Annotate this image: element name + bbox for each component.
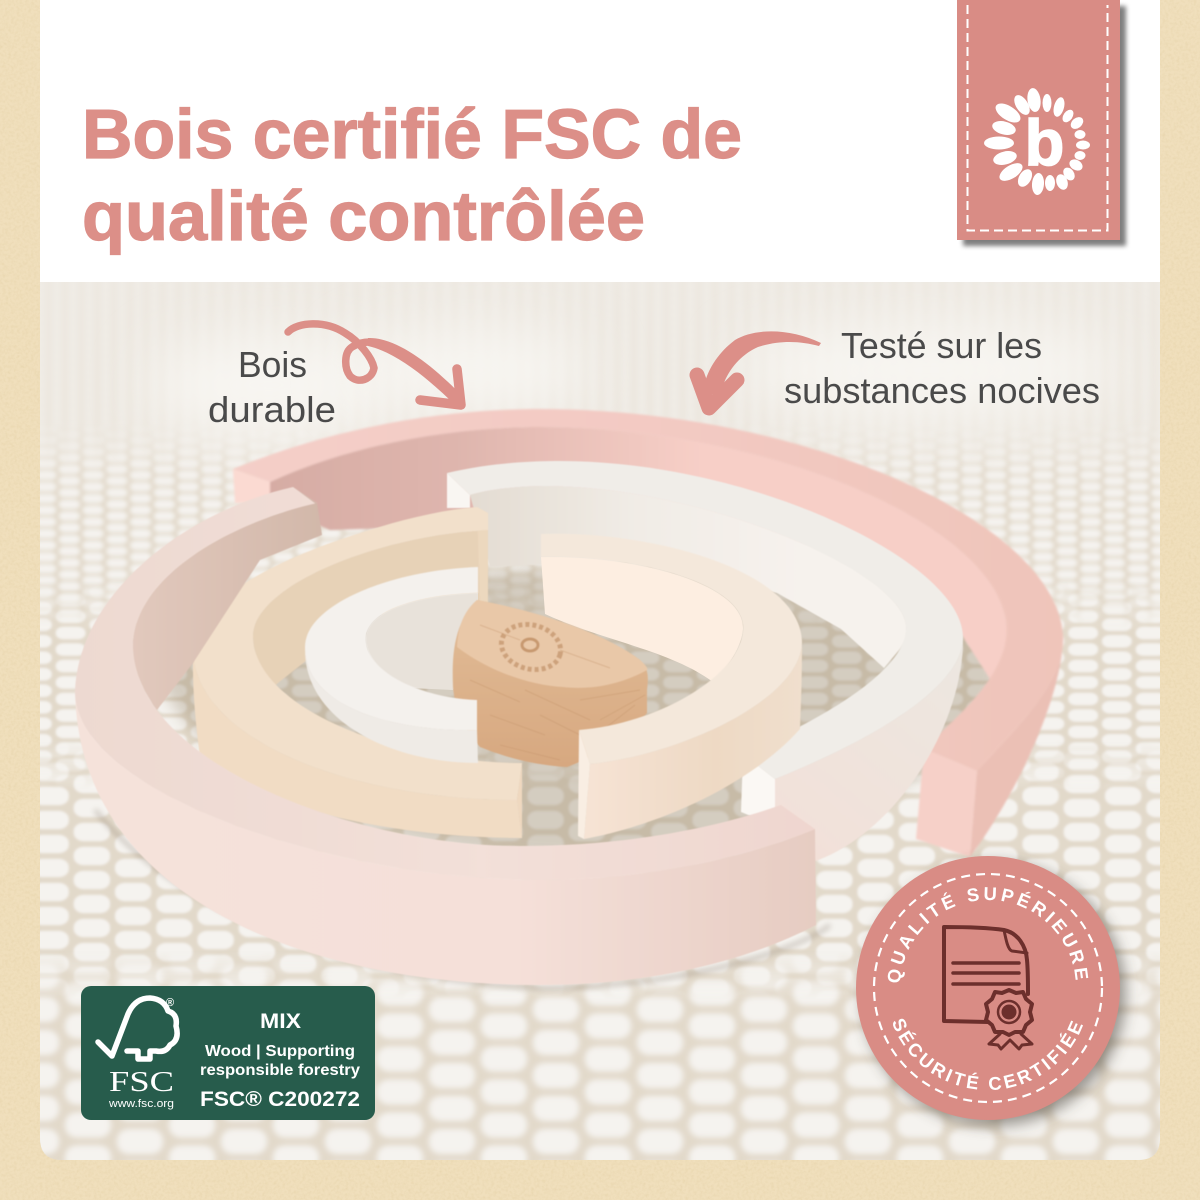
brand tag with logo: [957, 0, 1126, 246]
title: qualité contrôlée: [82, 177, 645, 255]
arch: tan ring: [193, 507, 522, 838]
icon: certificate: [944, 927, 1032, 1049]
FSC licence text: responsible forestry: [200, 1062, 360, 1079]
label: Bois durable: durable: [208, 389, 336, 430]
half-disc natural wood piece: [453, 600, 648, 767]
FSC registered mark: ®: [166, 997, 174, 1009]
FSC licence text: Wood | Supporting: [205, 1043, 355, 1060]
seal text top: QUALITÉ SUPÉRIEURE: [888, 887, 1088, 982]
arch: small white ring: [305, 567, 478, 763]
FSC website: www.fsc.org: [108, 1098, 174, 1110]
shadow inside and under the rings: [95, 566, 1002, 988]
FSC badge: [81, 986, 375, 1120]
label: Testé sur les substances nocives: Testé sur les: [841, 325, 1042, 366]
title: Bois certifié FSC de: [82, 95, 742, 173]
quality seal badge: [853, 853, 1135, 1135]
white title panel: [40, 0, 1160, 282]
FSC licence text: MIX: [260, 1010, 301, 1033]
icon: FSC tree and check mark: [98, 998, 177, 1059]
photo: wooden rainbow on woven rug: [40, 282, 1160, 1160]
arch: large pink far ring: [233, 409, 1063, 857]
woven rug background: [20, 262, 1180, 1180]
arch: peach inner wall: [541, 557, 743, 682]
arch: outer light pink ring: [75, 487, 816, 985]
logo letter b: b: [1025, 106, 1064, 179]
label: Testé sur les substances nocives: [784, 325, 1100, 411]
label: Testé sur les substances nocives: substances nocives: [784, 370, 1100, 411]
FSC licence text: FSC® C200272: [200, 1088, 360, 1111]
FSC licence text: [200, 1010, 360, 1111]
engraved logo: [498, 622, 564, 672]
title: [82, 95, 742, 255]
arch: peach medium ring: [541, 534, 802, 839]
seal text bottom: SÉCURITÉ CERTIFIÉE: [893, 1018, 1083, 1090]
icon: flower logo: [984, 87, 1090, 195]
label: Bois durable: [208, 344, 336, 430]
FSC wordmark: FSC: [109, 1066, 174, 1098]
arrow: looping arrow to wood: [288, 324, 464, 406]
arch: white large ring: [447, 461, 963, 861]
label: Bois durable: Bois: [238, 344, 307, 385]
arch: small white ring inner wall: [366, 593, 478, 690]
arrow: curved arrow to ring: [697, 331, 821, 408]
